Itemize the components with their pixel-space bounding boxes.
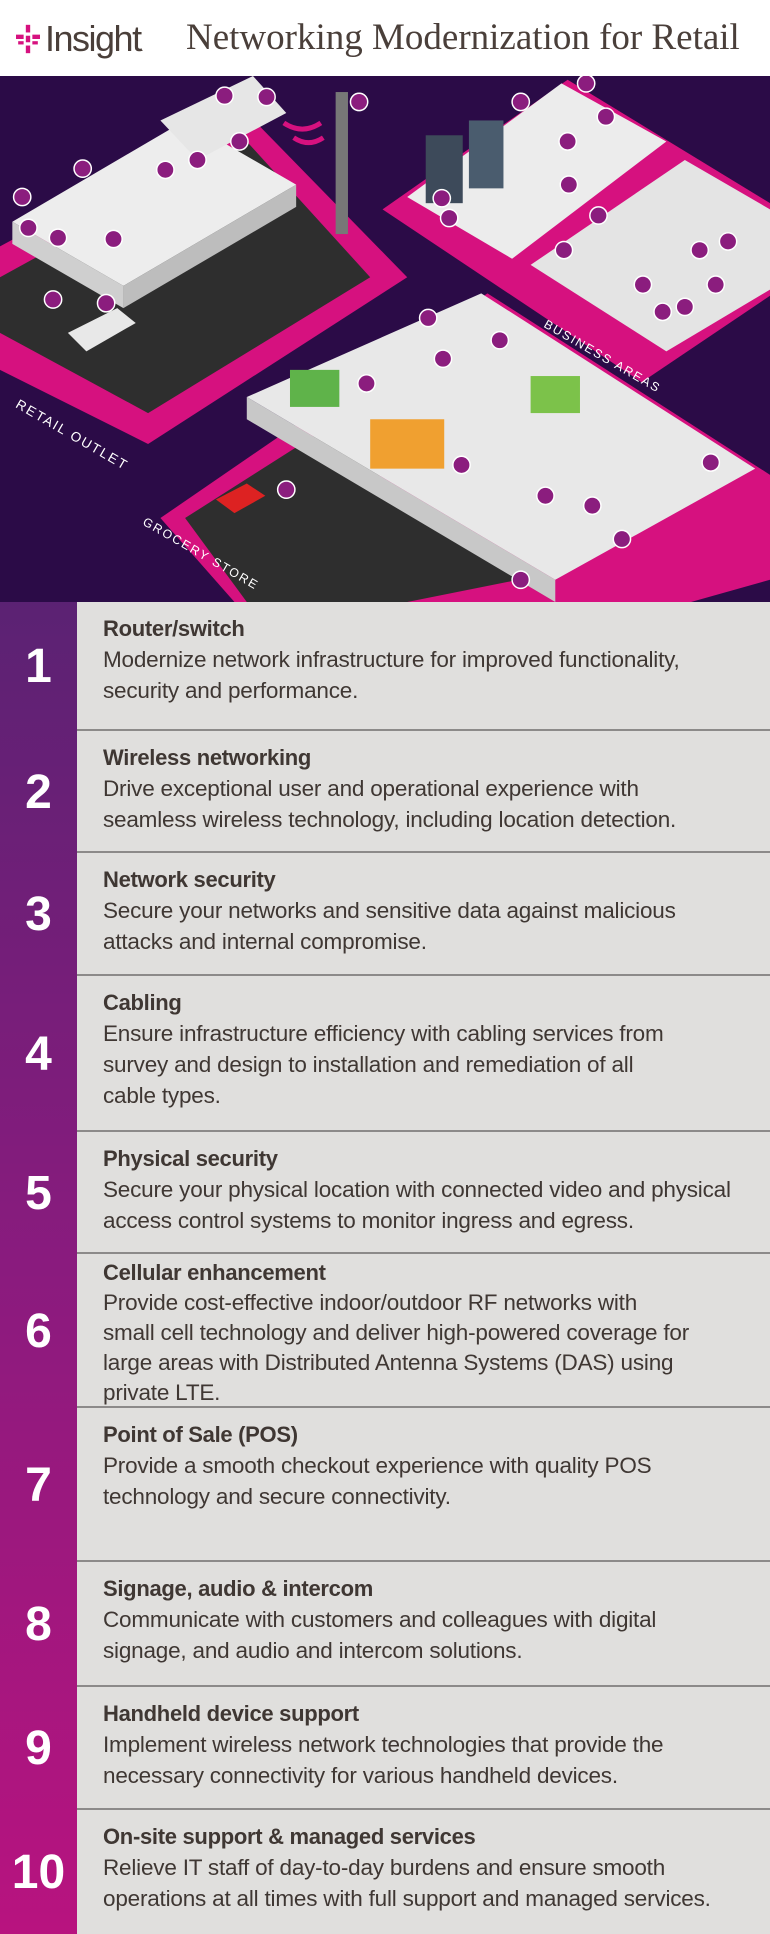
item 4: Ensure infrastructure efficiency with cabling services from [103, 1021, 664, 1046]
item 9: 9 [25, 1722, 52, 1775]
item 3 [25, 853, 770, 976]
item 3: Network security [103, 867, 276, 892]
item 2: Drive exceptional user and operational experience with [103, 776, 639, 801]
item 10: 10 [12, 1846, 65, 1898]
item 3: attacks and internal compromise. [103, 929, 427, 954]
panel: business areas [383, 80, 770, 396]
item 4 [25, 976, 770, 1132]
illustration [0, 76, 770, 602]
item 4: cable types. [103, 1083, 221, 1108]
item 2: 2 [25, 766, 52, 818]
item 6: 6 [25, 1304, 52, 1358]
item 9: necessary connectivity for various handheld devices. [103, 1763, 618, 1788]
item 8: Signage, audio & intercom [103, 1576, 373, 1601]
panel: grocery store [140, 293, 770, 602]
item 7: technology and secure connectivity. [103, 1484, 451, 1509]
item 8: signage, and audio and intercom solutions. [103, 1638, 522, 1663]
item 1: Modernize network infrastructure for improved functionality, [103, 647, 680, 672]
item 6: small cell technology and deliver high-powered coverage for [103, 1320, 689, 1345]
logo: Insight. [45, 18, 142, 59]
item 3: 3 [25, 888, 52, 941]
item 8 [25, 1562, 770, 1687]
item 2 [25, 731, 770, 853]
item 6: Provide cost-effective indoor/outdoor RF networks with [103, 1290, 637, 1315]
item 8: 8 [25, 1598, 52, 1651]
item 5 [25, 1132, 770, 1254]
title: Networking Modernization for Retail [186, 17, 740, 58]
panel: grocery store: GROCERY STORE [140, 515, 261, 593]
item 5: Secure your physical location with connected video and physical [103, 1177, 731, 1202]
list panel [0, 602, 770, 1934]
item 10 [12, 1810, 770, 1934]
item 1: 1 [25, 640, 52, 693]
item 3: Secure your networks and sensitive data against malicious [103, 898, 676, 923]
item 1: Router/switch [103, 616, 245, 641]
item 6: private LTE. [103, 1380, 220, 1405]
item 6: large areas with Distributed Antenna Systems (DAS) using [103, 1350, 673, 1375]
panel: business areas: BUSINESS AREAS [541, 317, 663, 396]
item 6 [25, 1254, 770, 1408]
item 10: On-site support & managed services [103, 1824, 475, 1849]
item 8: Communicate with customers and colleagues with digital [103, 1607, 656, 1632]
icon: insight mark [16, 24, 40, 54]
panel: retail outlet [0, 76, 407, 473]
item 10: operations at all times with full support and managed services. [103, 1886, 711, 1911]
item 1 [25, 602, 770, 731]
callout markers [14, 75, 737, 588]
item 7: Point of Sale (POS) [103, 1422, 298, 1447]
item 9 [25, 1687, 770, 1810]
item 5: Physical security [103, 1146, 278, 1171]
item 10: Relieve IT staff of day-to-day burdens and ensure smooth [103, 1855, 665, 1880]
item 7: Provide a smooth checkout experience with quality POS [103, 1453, 651, 1478]
item 2: seamless wireless technology, including location detection. [103, 807, 676, 832]
icon: cell tower [284, 92, 348, 234]
item 2: Wireless networking [103, 745, 311, 770]
item 5: access control systems to monitor ingress and egress. [103, 1208, 634, 1233]
item 4: Cabling [103, 990, 182, 1015]
item 9: Implement wireless network technologies that provide the [103, 1732, 663, 1757]
header [0, 0, 770, 76]
item 9: Handheld device support [103, 1701, 359, 1726]
item 1: security and performance. [103, 678, 358, 703]
panel: retail outlet: RETAIL OUTLET [13, 397, 131, 473]
item 4: survey and design to installation and remediation of all [103, 1052, 633, 1077]
item 6: Cellular enhancement [103, 1260, 326, 1285]
item 5: 5 [25, 1166, 52, 1220]
item 7: 7 [25, 1458, 52, 1512]
item 4: 4 [25, 1028, 52, 1080]
item 7 [25, 1408, 770, 1562]
